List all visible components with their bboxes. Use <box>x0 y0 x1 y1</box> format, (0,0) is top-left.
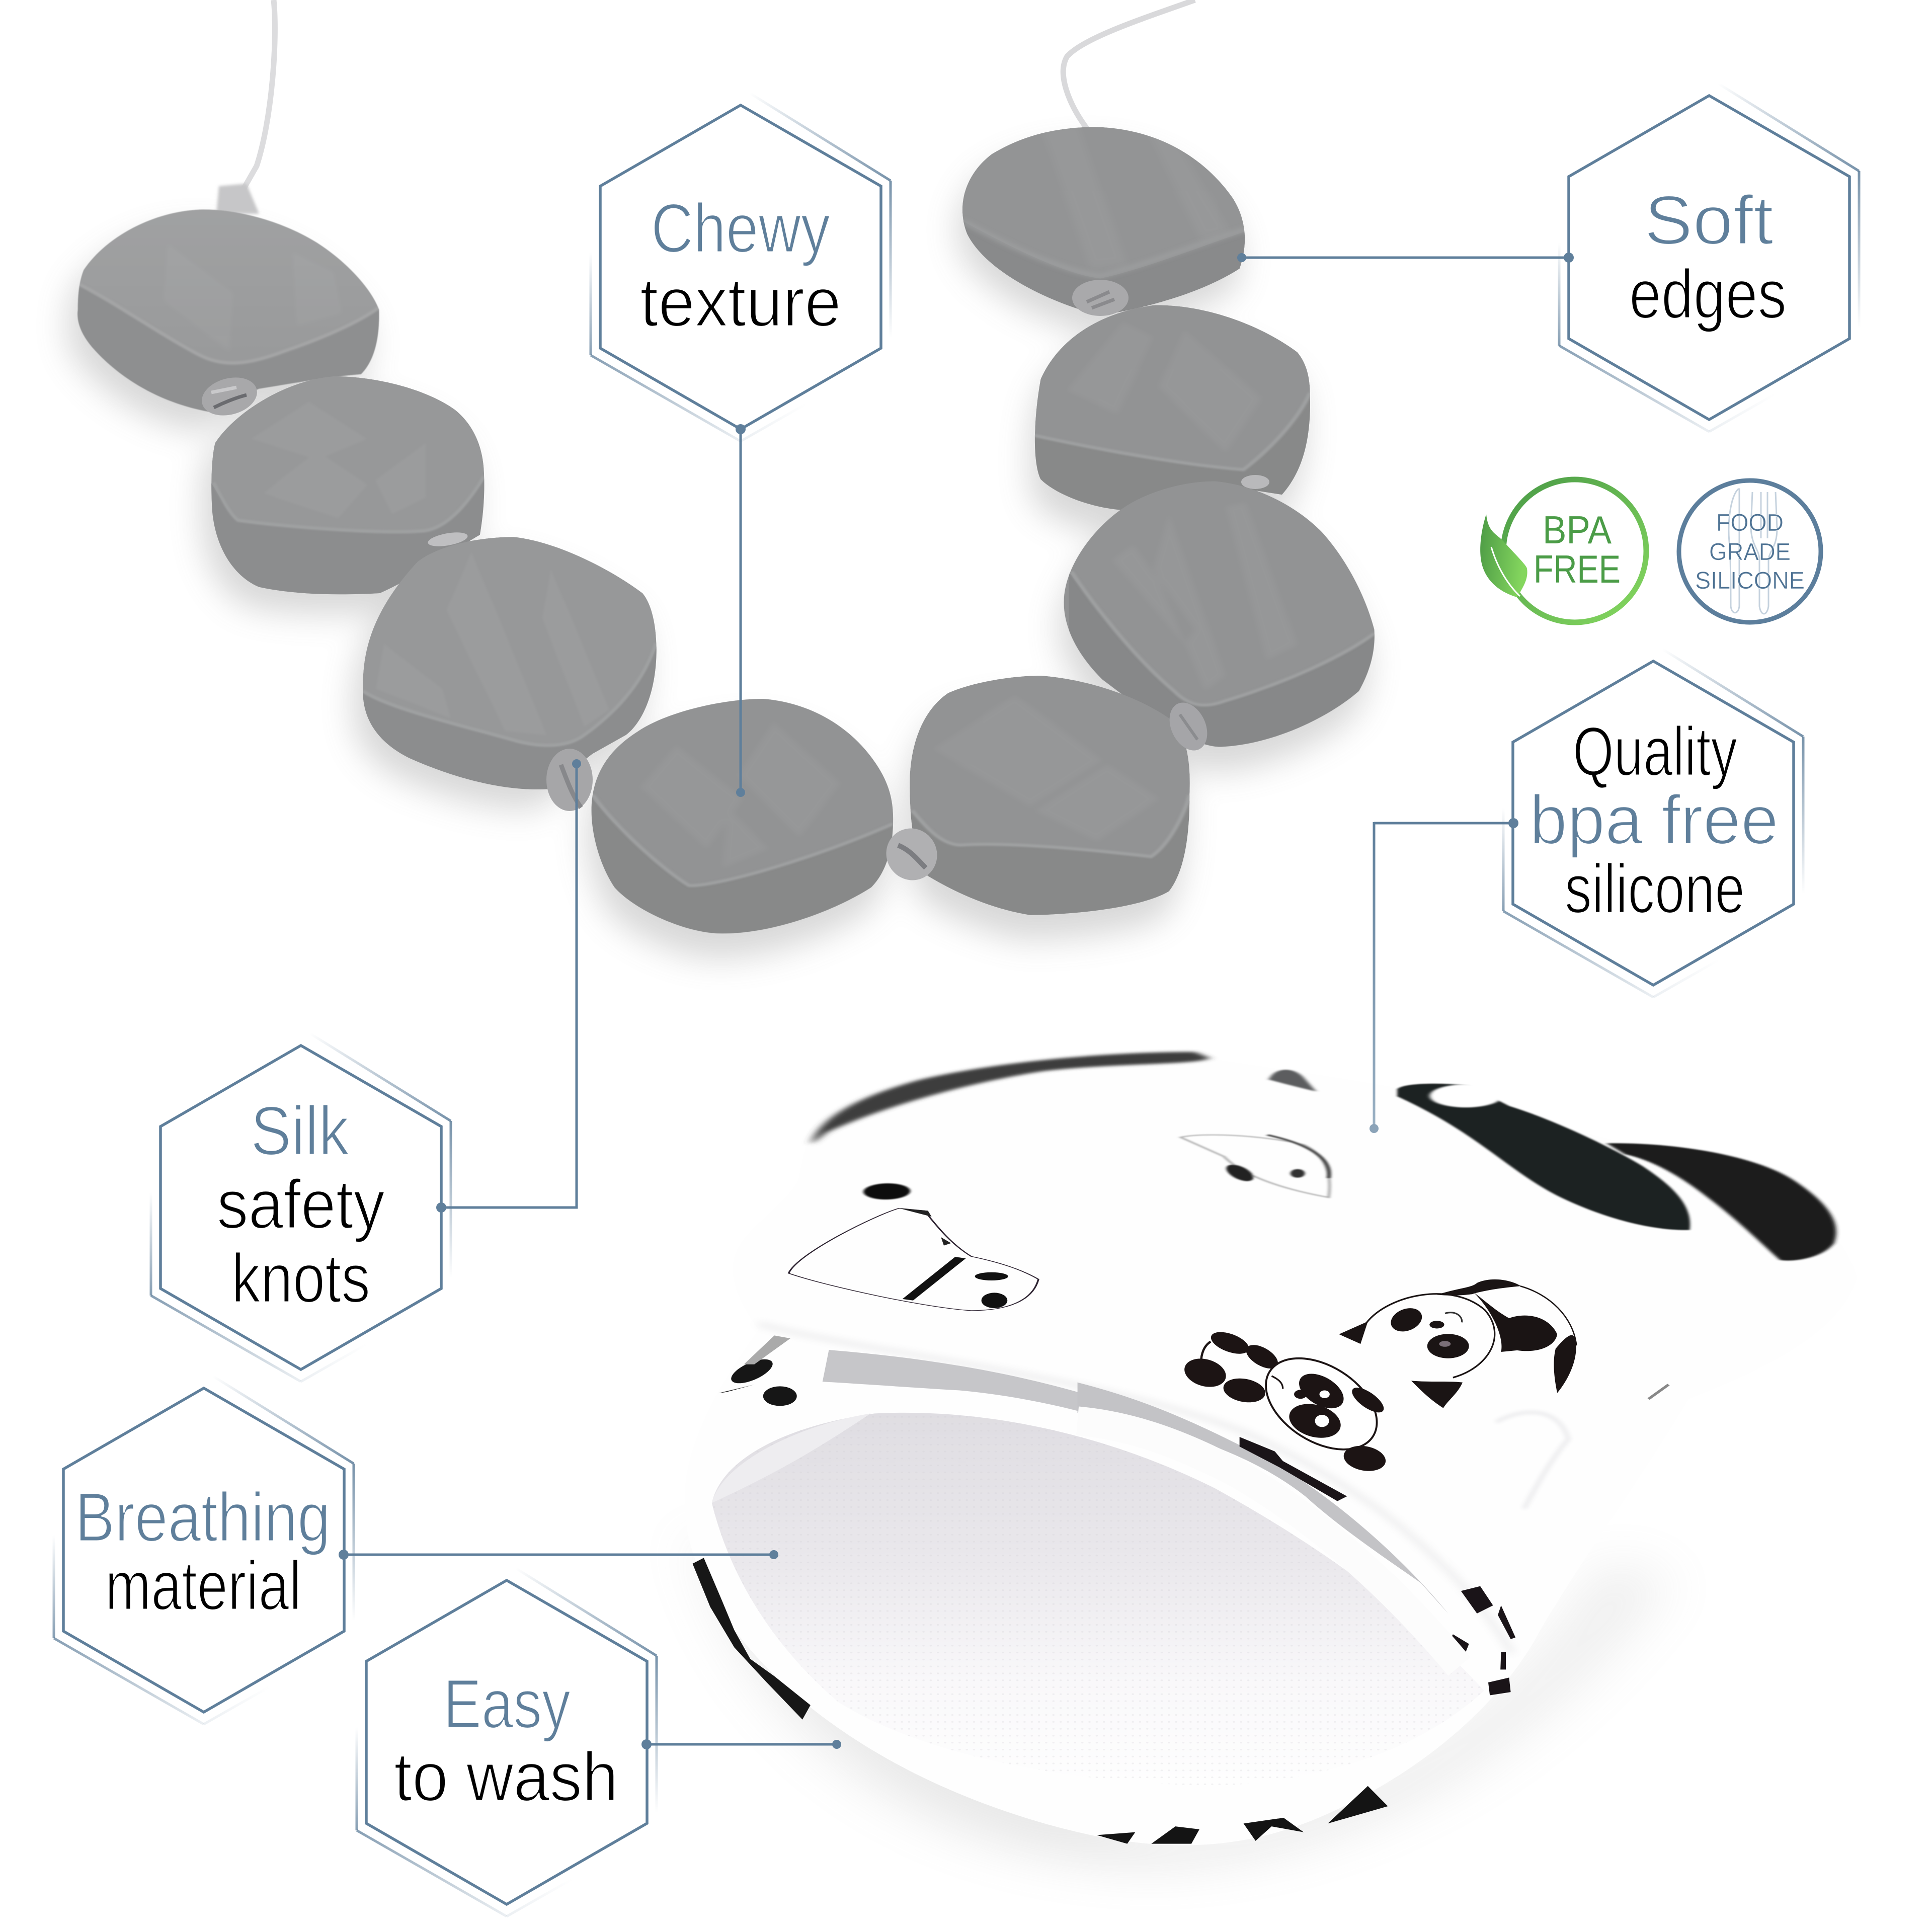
fabric hem <box>1078 1421 1460 1666</box>
label: Chewy <box>651 190 830 267</box>
icon: leaf <box>1480 514 1527 597</box>
mitten top: ears and prints <box>788 1052 1836 1311</box>
grey strip left part <box>823 1350 1224 1463</box>
hexagon: silk safety knots: safety <box>217 1166 385 1243</box>
badge: food grade silicone: SILICONE <box>1695 568 1805 594</box>
hexagon: silk safety knots <box>151 1033 451 1382</box>
bead 3 <box>361 537 659 793</box>
left cord <box>236 0 275 201</box>
mitten opening: velcro strip, hem and pandas <box>1078 1279 1576 1695</box>
badge: BPA free: BPA <box>1543 508 1612 552</box>
icon: knife and fork <box>1729 489 1777 614</box>
hexagon: quality bpa free silicone <box>1503 649 1803 997</box>
badge: food grade silicone: GRADE <box>1709 539 1791 566</box>
thumb seam <box>1649 1385 1668 1399</box>
connector: soft edges <box>1237 253 1569 262</box>
hem print left <box>693 1558 811 1720</box>
grey velcro strip <box>1078 1383 1448 1614</box>
connector: chewy texture <box>736 429 745 797</box>
print: small blurred panda <box>1181 1135 1330 1197</box>
hexagon: quality bpa free silicone: silicone <box>1565 850 1745 928</box>
knot center left <box>546 749 593 811</box>
knot small right <box>1241 475 1269 489</box>
print: eye blob <box>855 1181 918 1202</box>
hexagon: easy to wash: to wash <box>394 1738 618 1816</box>
knot center <box>877 819 946 890</box>
label: Quality <box>1573 713 1737 790</box>
bead 7 <box>1030 305 1313 514</box>
connector: quality silicone <box>1370 822 1514 1133</box>
mitten photo <box>685 1052 1857 1867</box>
hexagon: soft edges <box>1559 84 1859 432</box>
teether necklace photo <box>67 0 1377 959</box>
bead 4 <box>590 699 896 937</box>
hexagon: chewy texture: texture <box>640 264 841 341</box>
label: Easy <box>443 1665 571 1743</box>
mitten body and interior <box>685 1058 1857 1845</box>
label: Soft <box>1644 182 1774 259</box>
hexagon: breathing material <box>54 1376 354 1724</box>
bead 5 <box>910 676 1192 918</box>
knot top right <box>1072 280 1129 316</box>
knot right <box>1162 696 1215 757</box>
black ear arc <box>811 1052 1210 1145</box>
label: Breathing <box>75 1479 331 1556</box>
bead 8 <box>962 127 1245 313</box>
knot left <box>198 372 261 421</box>
knot small left <box>427 530 468 549</box>
label: Silk <box>251 1092 350 1170</box>
flap edge shadow <box>758 1324 1512 1653</box>
right hem print <box>1461 1586 1515 1695</box>
inner lining fold <box>712 1413 870 1503</box>
hexagon: soft edges: edges <box>1629 256 1787 333</box>
badge: food grade silicone <box>1679 480 1821 622</box>
bead 1 <box>75 209 382 418</box>
lining print left <box>718 1335 797 1406</box>
hexagon: silk safety knots: knots <box>231 1240 370 1317</box>
cuff seam detail <box>1496 1412 1568 1509</box>
connector: easy to wash <box>648 1740 841 1749</box>
mitten ground shadow <box>702 1526 1657 1867</box>
connector: silk knots <box>443 759 581 1208</box>
hexagon: chewy texture <box>591 93 891 441</box>
hem print bottom <box>1097 1786 1388 1844</box>
connector: breathing material <box>345 1550 778 1559</box>
print: flap panda <box>788 1209 1038 1311</box>
black ear rear <box>1606 1143 1836 1261</box>
cord end left <box>216 184 259 214</box>
bead 6 <box>1064 481 1377 753</box>
hexagon: easy to wash <box>357 1568 657 1916</box>
ear white patch <box>1430 1084 1502 1107</box>
hexagon: breathing material: material <box>105 1547 301 1625</box>
right cord <box>1063 0 1195 128</box>
big panda print <box>1339 1279 1576 1408</box>
hexagon: quality bpa free silicone: bpa free <box>1530 781 1779 859</box>
badge: BPA free: FREE <box>1534 547 1621 591</box>
grey bump <box>1269 1070 1316 1092</box>
badge: BPA free <box>1480 479 1646 622</box>
black ear front <box>1397 1084 1690 1230</box>
badge: food grade silicone: FOOD <box>1716 510 1784 536</box>
bead 2 <box>211 376 486 597</box>
velcro black print <box>1240 1437 1469 1652</box>
flap print panda <box>1181 1328 1393 1474</box>
necklace shadow <box>67 147 1370 959</box>
interior mesh <box>712 1413 1484 1786</box>
